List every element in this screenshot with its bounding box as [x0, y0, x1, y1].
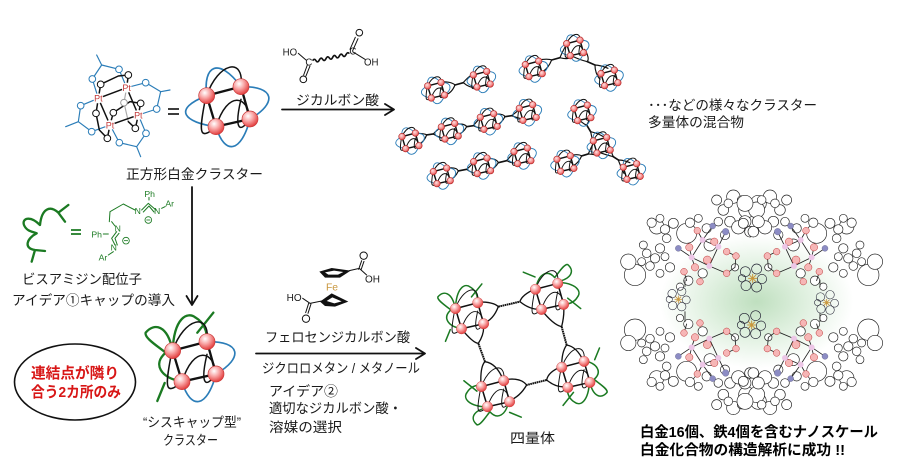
- arrow: down to cis-capped cluster: [186, 187, 198, 305]
- callout: only two adjacent linking points: 合う2カ所のみ: [31, 384, 121, 401]
- panel: square platinum cluster: [66, 55, 269, 182]
- icon: platinum cluster structural formula: [66, 55, 170, 157]
- label: cis-capped cluster: “シスキャップ型”: [143, 415, 241, 430]
- panel: bisamidinate ligand: [24, 189, 174, 263]
- label: solvent: ジクロロメタン / メタノール: [262, 361, 420, 376]
- ferrocene dicarboxylic acid formula: OH: [365, 274, 380, 285]
- dicarboxylic acid formula: HO: [283, 48, 298, 59]
- ligand structural formula: Ar: [99, 253, 107, 263]
- label: tetramer: 四量体: [510, 431, 556, 446]
- equals sign: [168, 109, 179, 114]
- label: cis-capped cluster: [143, 415, 241, 448]
- panel: oligomer mixture: [396, 34, 646, 189]
- ligand structural formula: Ph: [91, 230, 102, 240]
- text: idea 2: 適切なジカルボン酸・: [269, 401, 402, 416]
- icon: platinum cluster structural formula: Pt: [122, 83, 131, 93]
- ligand structural formula: Ar: [165, 199, 174, 209]
- callout: only two adjacent linking points: 連結点が隣り: [31, 364, 119, 382]
- text: mixture note: ･･･などの様々なクラスター: [648, 98, 817, 113]
- ligand structural formula: N: [154, 206, 160, 216]
- text: idea 2: 溶媒の選択: [269, 420, 343, 435]
- ligand structural formula: N: [135, 206, 141, 216]
- icon: ligand schematic: [24, 205, 68, 262]
- text: structure result: [640, 423, 878, 459]
- icon: platinum cluster structural formula: Pt: [94, 94, 103, 104]
- dicarboxylic acid formula: C: [349, 47, 356, 58]
- label: cis-capped cluster: クラスター: [163, 433, 218, 448]
- equals sign: [71, 230, 81, 234]
- ligand structural formula: N: [115, 223, 121, 233]
- text: idea 2: アイデア②: [269, 383, 339, 399]
- icon: platinum cluster structural formula: Pt: [106, 120, 115, 130]
- ferrocene dicarboxylic acid formula: [287, 252, 380, 322]
- text: structure result: 白金16個、鉄4個を含むナノスケール: [640, 423, 878, 441]
- dicarboxylic acid formula: C: [305, 58, 312, 69]
- label: square platinum cluster: 正方形白金クラスター: [126, 167, 263, 182]
- arrow: to tetramer: [256, 348, 425, 359]
- dicarboxylic acid formula: [283, 29, 379, 83]
- ferrocene dicarboxylic acid formula: Fe: [326, 283, 338, 294]
- icon: cis-capped cluster: [146, 313, 235, 402]
- panel: crystal structure: [621, 190, 883, 415]
- icon: platinum cluster structural formula: Pt: [134, 110, 143, 120]
- text: mixture note: 多量体の混合物: [648, 115, 744, 130]
- dicarboxylic acid formula: OH: [364, 57, 379, 68]
- text: mixture note: [648, 98, 817, 130]
- text: structure result: 白金化合物の構造解析に成功 !!: [640, 441, 845, 459]
- callout: only two adjacent linking points: [14, 344, 136, 420]
- icon: cluster schematic: [186, 67, 269, 147]
- arrow: to oligomer mixture: [282, 104, 394, 115]
- panel: tetramer: [438, 264, 607, 425]
- ferrocene dicarboxylic acid formula: HO: [287, 293, 302, 304]
- label: dicarboxylic acid: ジカルボン酸: [296, 93, 380, 108]
- label: idea 1: アイデア①キャップの導入: [12, 292, 176, 308]
- ligand structural formula: N: [111, 243, 117, 253]
- ligand structural formula: [91, 189, 174, 263]
- ligand structural formula: Ph: [144, 189, 155, 199]
- label: bisamidinate ligand: ビスアミジン配位子: [22, 272, 142, 287]
- label: ferrocene dicarboxylic acid: フェロセンジカルボン酸: [265, 330, 410, 345]
- text: idea 2: [269, 383, 402, 435]
